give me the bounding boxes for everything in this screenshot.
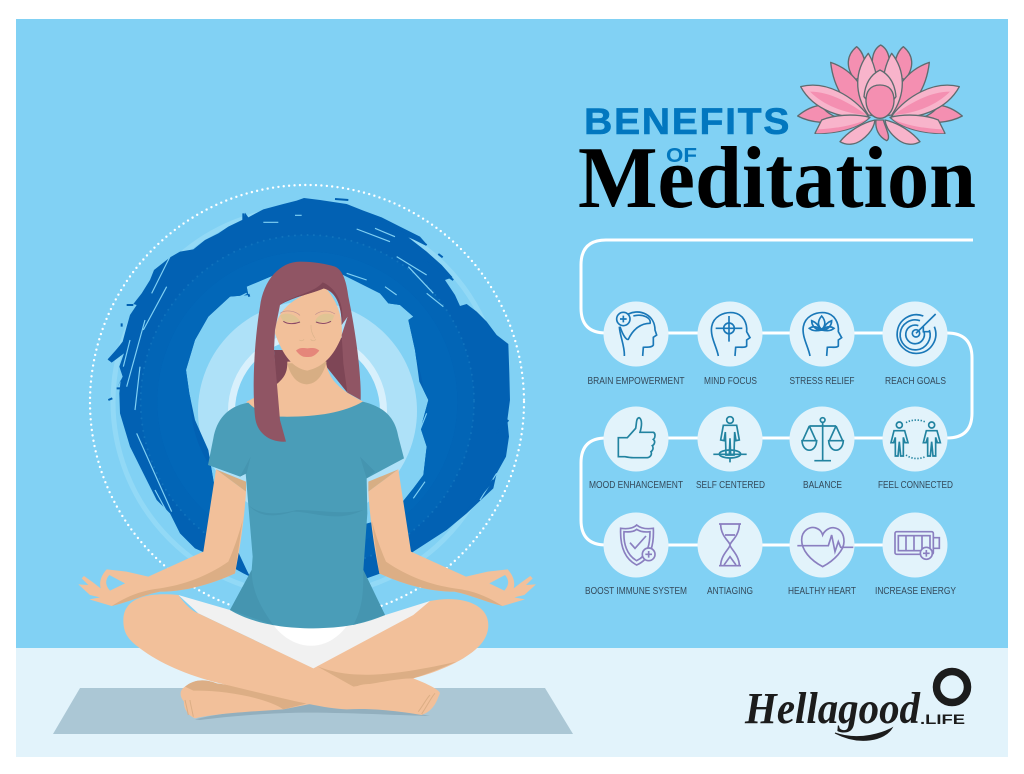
mat shadow	[195, 703, 430, 720]
shirt	[208, 402, 404, 628]
right arm	[368, 469, 536, 606]
front leg and foot	[123, 594, 440, 715]
item: boost immune system	[585, 512, 687, 597]
item: stress relief	[790, 302, 854, 387]
item: balance: BALANCE	[803, 480, 842, 491]
item: healthy heart	[788, 512, 856, 597]
face	[275, 287, 342, 371]
item: stress relief: STRESS RELIEF	[790, 376, 854, 387]
item: increase energy: INCREASE ENERGY	[875, 586, 956, 597]
logo wordmark: Hellagood	[744, 684, 921, 733]
title	[578, 101, 976, 227]
logo	[744, 672, 968, 740]
item: mind focus: MIND FOCUS	[704, 376, 757, 387]
item: balance	[790, 406, 854, 491]
yoga mat	[53, 688, 573, 734]
item: reach goals	[882, 302, 948, 387]
item: mood enhancement	[589, 406, 683, 491]
shorts	[178, 595, 430, 668]
brush stroke ring	[108, 198, 510, 578]
heading: of: OF	[666, 145, 697, 167]
item: self centered	[696, 406, 765, 491]
heading: benefits: BENEFITS	[584, 101, 791, 142]
benefits row 3	[585, 512, 956, 597]
neck and shoulders	[247, 362, 363, 423]
lips	[296, 348, 319, 357]
item: increase energy	[875, 512, 956, 597]
left arm	[78, 469, 246, 606]
item: brain empowerment	[588, 302, 684, 387]
background panel	[16, 19, 1008, 648]
item: mind focus	[698, 302, 762, 387]
fringe shadow	[279, 282, 342, 325]
item: antiaging: ANTIAGING	[707, 586, 753, 597]
item: healthy heart: HEALTHY HEART	[788, 586, 856, 597]
legs	[123, 594, 488, 720]
floor	[16, 648, 1008, 757]
meditating woman	[78, 262, 536, 720]
dark hair behind neck	[274, 337, 347, 393]
arms	[78, 469, 536, 606]
item: brain empowerment: BRAIN EMPOWERMENT	[588, 376, 684, 387]
logo suffix: .LIFE	[920, 711, 965, 727]
nose	[299, 325, 316, 341]
back leg	[181, 599, 488, 718]
winding path	[581, 240, 973, 545]
item: reach goals: REACH GOALS	[885, 376, 946, 387]
heading: meditation: Meditation	[578, 130, 976, 227]
logo swash	[835, 728, 892, 740]
item: self centered: SELF CENTERED	[696, 480, 765, 491]
eyes	[280, 314, 334, 323]
benefits row 1	[588, 302, 948, 387]
icon: lotus	[798, 45, 962, 144]
hair	[254, 262, 361, 442]
item: feel connected	[878, 406, 953, 491]
shirt shading	[230, 457, 385, 625]
item: boost immune system: BOOST IMMUNE SYSTEM	[585, 586, 687, 597]
item: feel connected: FEEL CONNECTED	[878, 480, 953, 491]
item: antiaging	[698, 512, 762, 597]
benefits row 2	[589, 406, 953, 491]
logo ring	[936, 672, 968, 702]
item: mood enhancement: MOOD ENHANCEMENT	[589, 480, 683, 491]
head	[254, 262, 361, 442]
meditation halo circles	[90, 185, 524, 619]
